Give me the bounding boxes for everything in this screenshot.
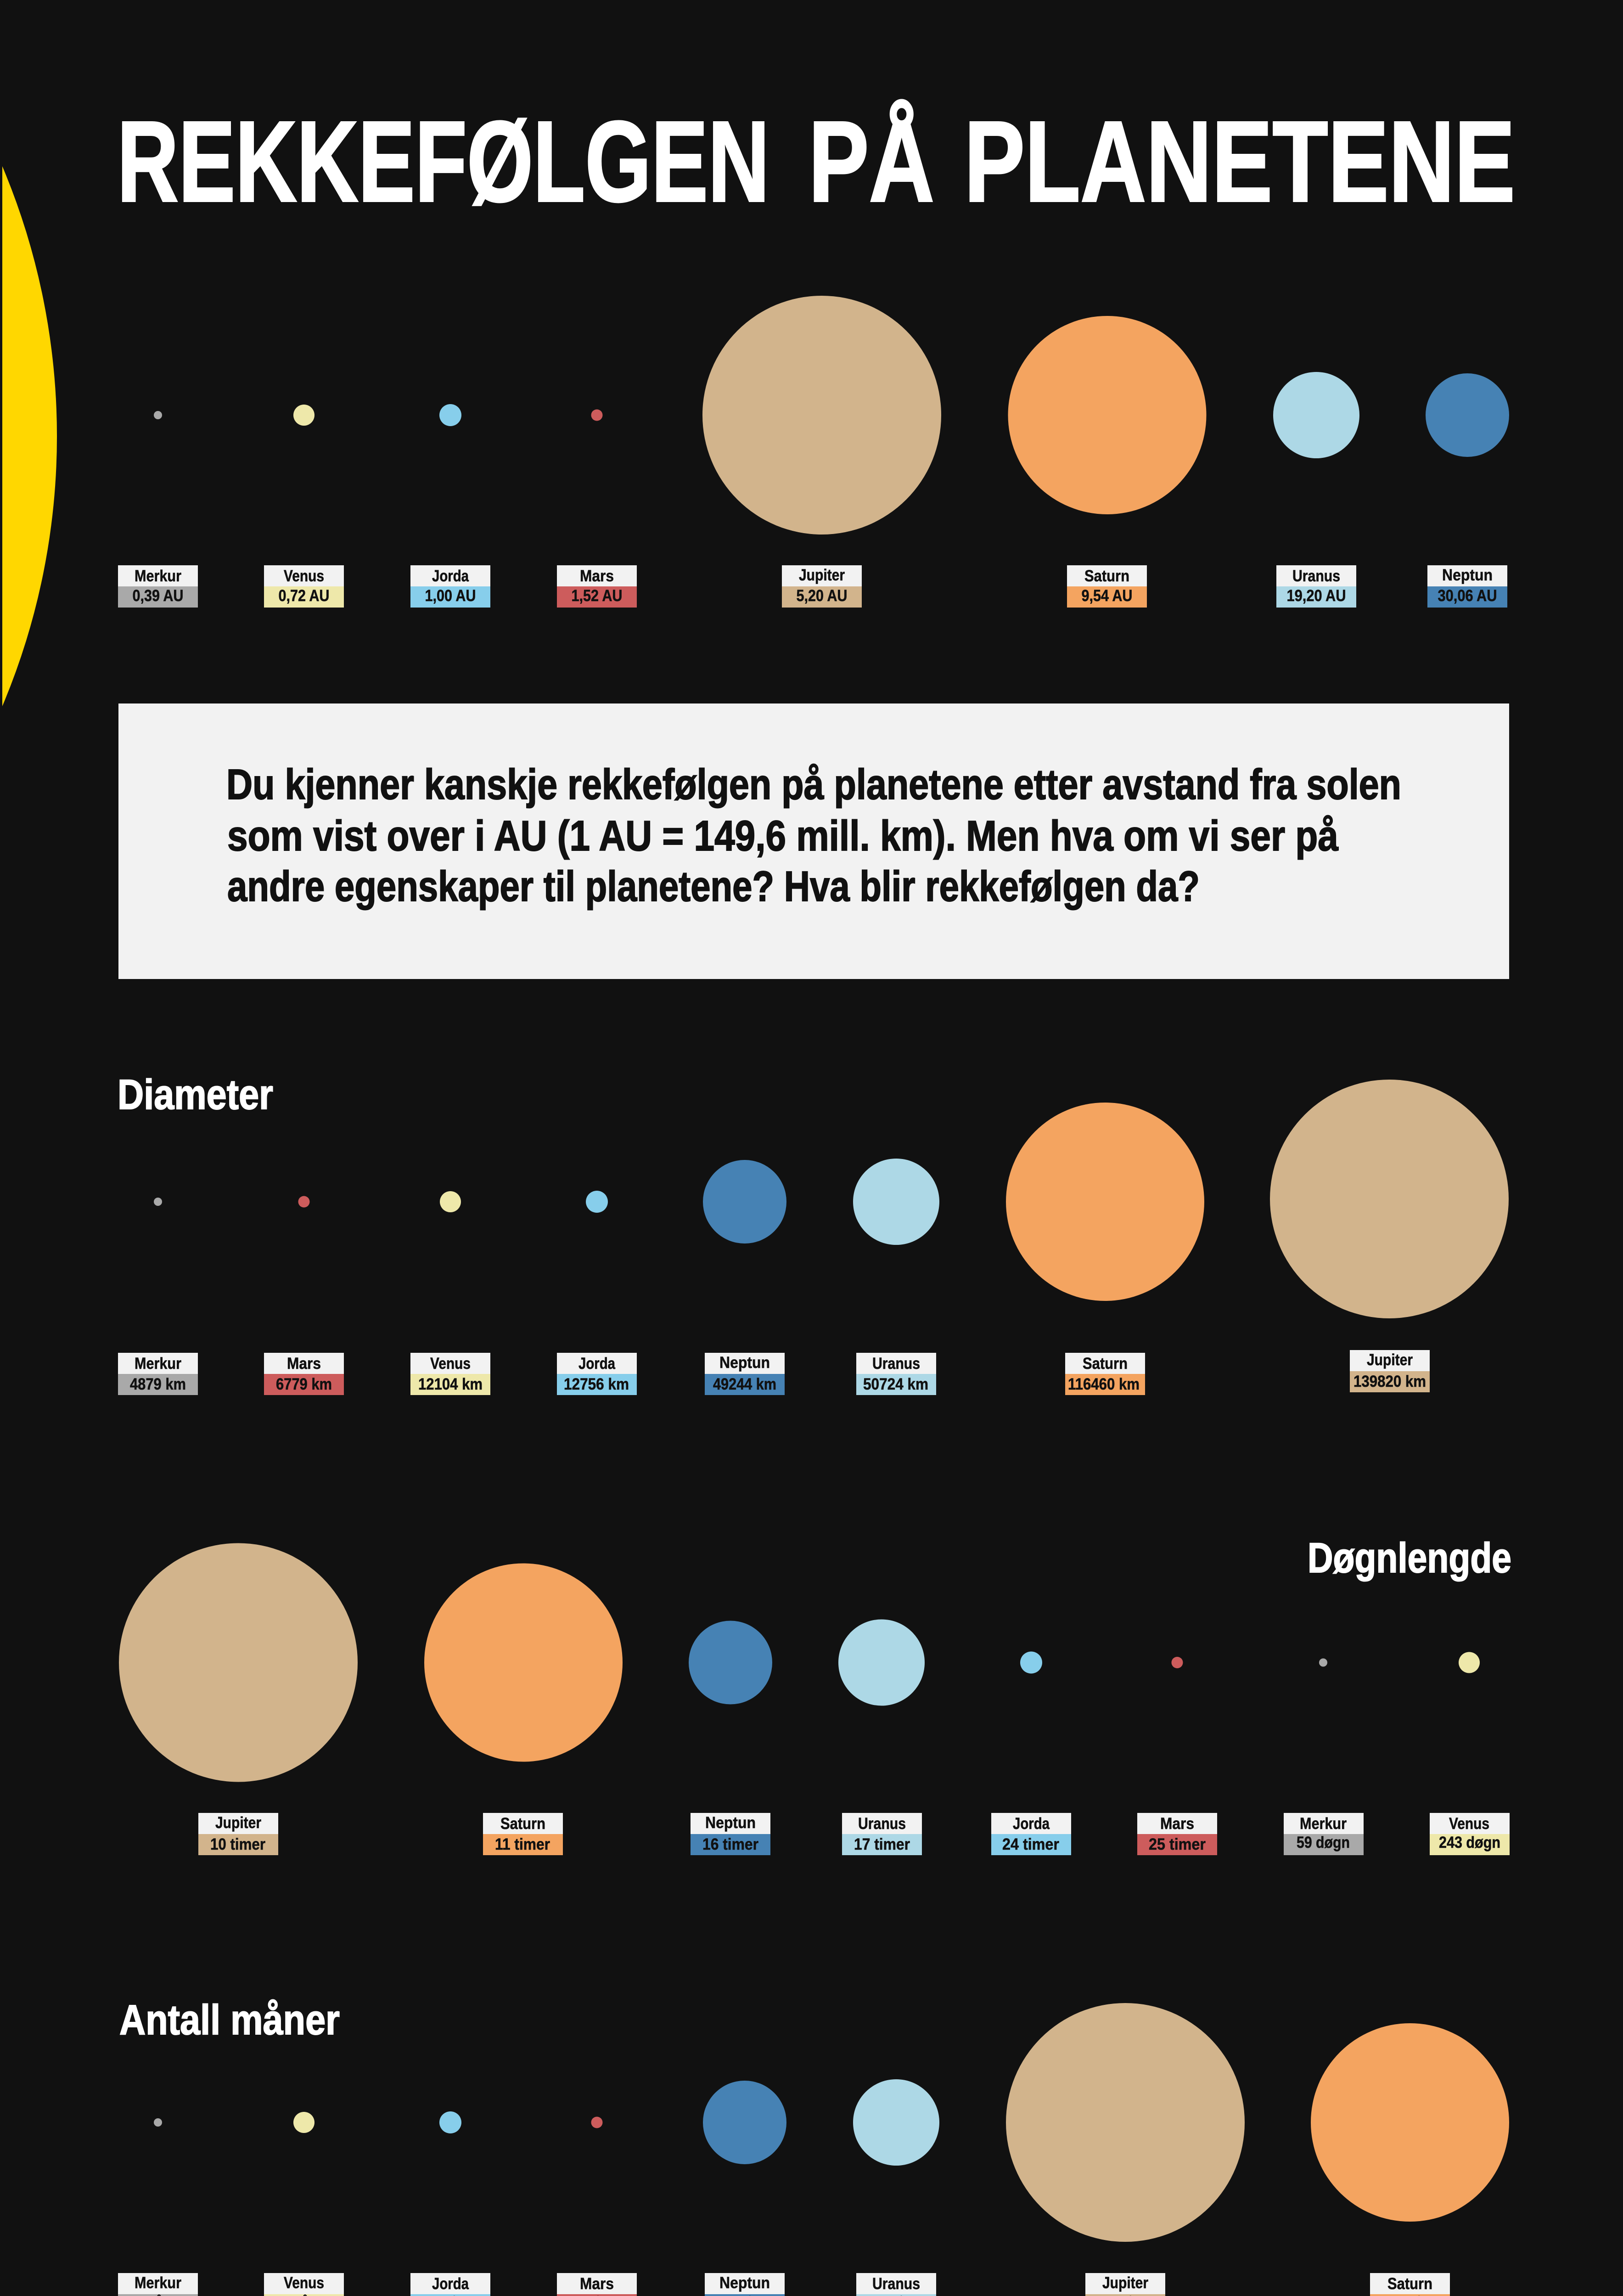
label: Venus 12104 km: 12104 km — [418, 1375, 483, 1393]
label: Jupiter 10 timer — [198, 1813, 278, 1855]
planet: Saturn — [1006, 1103, 1204, 1301]
label: Venus 243 døgn: Venus — [1449, 1815, 1489, 1833]
planet: Uranus — [853, 2079, 939, 2166]
planet: Jupiter — [1270, 1080, 1509, 1318]
label: Saturn 274 måner — [1370, 2273, 1450, 2296]
planet: Neptun — [689, 1621, 772, 1705]
label: Mars 6779 km — [264, 1353, 344, 1395]
intro text: som vist over i AU (1 AU = 149,6 mill. km). Men hva om vi ser på — [227, 812, 1338, 860]
label: Saturn 116460 km: 116460 km — [1068, 1375, 1140, 1393]
label: Saturn 116460 km — [1065, 1353, 1145, 1395]
label: Neptun 16 timer: 16 timer — [702, 1835, 758, 1853]
label: Jupiter 95 måner — [1085, 2273, 1165, 2296]
label: Jorda 12756 km: 12756 km — [564, 1375, 629, 1393]
label: Saturn 9,54 AU: 9,54 AU — [1082, 587, 1132, 605]
label: Mars 25 timer — [1137, 1813, 1217, 1855]
planet: Uranus — [838, 1619, 925, 1705]
label: Merkur 0 måner — [118, 2273, 198, 2296]
label: Merkur 0,39 AU: 0,39 AU — [132, 587, 184, 605]
planet: Merkur — [154, 1198, 162, 1206]
label: Jorda 12756 km: Jorda — [578, 1355, 615, 1373]
label: Venus 0 måner — [264, 2273, 344, 2296]
label: Neptun 49244 km — [705, 1353, 785, 1395]
planet: Mars — [1172, 1657, 1183, 1668]
label: Saturn 11 timer: Saturn — [500, 1815, 545, 1833]
title: REKKEFØLGEN — [117, 97, 769, 225]
label: Mars 1,52 AU — [557, 565, 637, 608]
planet: Saturn — [424, 1563, 623, 1761]
label: Venus 12104 km — [410, 1353, 490, 1395]
planet: Saturn — [1311, 2023, 1509, 2222]
label: Jupiter 139820 km: 139820 km — [1353, 1373, 1426, 1390]
label: Merkur 4879 km: Merkur — [135, 1355, 181, 1373]
label: Jorda 1,00 AU: 1,00 AU — [425, 587, 476, 605]
label: Jorda 1 måne — [410, 2273, 490, 2296]
label: Neptun 16 timer — [691, 1813, 770, 1855]
planet: Venus — [1459, 1652, 1480, 1673]
label: Saturn 274 måner: Saturn — [1387, 2275, 1432, 2293]
planet: Merkur — [154, 411, 162, 419]
label: Mars 1,52 AU: Mars — [580, 567, 614, 585]
label: Neptun 30,06 AU: Neptun — [1442, 566, 1493, 584]
intro text: Du kjenner kanskje rekkefølgen på planetene etter avstand fra solen — [226, 760, 1401, 808]
panel: introduction — [118, 703, 1509, 979]
heading: Diameter: Diameter — [118, 1071, 273, 1118]
label: Neptun 16 timer: Neptun — [705, 1814, 756, 1832]
planet: Jupiter — [1006, 2003, 1245, 2242]
label: Mars 6779 km: Mars — [287, 1355, 321, 1373]
label: Merkur 4879 km: 4879 km — [130, 1375, 186, 1393]
label: Jupiter 139820 km: Jupiter — [1367, 1351, 1413, 1369]
label: Uranus 17 timer: 17 timer — [854, 1835, 910, 1853]
label: Merkur 59 døgn: Merkur — [1300, 1815, 1347, 1833]
label: Neptun 16 måner: Neptun — [719, 2274, 770, 2292]
label: Uranus 28 måner — [856, 2273, 936, 2296]
planet: Neptun — [703, 1160, 786, 1244]
row: distance from the sun — [118, 296, 1509, 608]
label: Venus 12104 km: Venus — [430, 1355, 471, 1373]
icon: sun — [2, 166, 57, 706]
label: Merkur 0,39 AU — [118, 565, 198, 608]
label: Jorda 1 måne: Jorda — [432, 2275, 469, 2293]
label: Jorda 24 timer — [991, 1813, 1071, 1855]
label: Uranus 19,20 AU: Uranus — [1292, 567, 1340, 585]
heading: Antall måner: Antall måner — [119, 1997, 340, 2043]
planet: Saturn — [1008, 316, 1207, 514]
label: Merkur 4879 km — [118, 1353, 198, 1395]
label: Uranus 17 timer: Uranus — [858, 1815, 906, 1833]
label: Mars 6779 km: 6779 km — [276, 1375, 332, 1393]
label: Venus 0,72 AU: Venus — [284, 567, 324, 585]
label: Uranus 28 måner: Uranus — [872, 2275, 920, 2293]
label: Venus 0,72 AU: 0,72 AU — [278, 587, 330, 605]
label: Mars 25 timer: Mars — [1160, 1815, 1194, 1833]
heading: Døgnlengde: Døgnlengde — [1308, 1535, 1511, 1581]
label: Jorda 12756 km — [557, 1353, 637, 1395]
label: Saturn 116460 km: Saturn — [1083, 1355, 1128, 1373]
label: Jupiter 139820 km — [1350, 1350, 1430, 1392]
label: Saturn 11 timer: 11 timer — [495, 1835, 550, 1853]
title — [117, 97, 1515, 225]
planet: Jorda — [439, 2111, 461, 2133]
intro text: andre egenskaper til planetene? Hva blir rekkefølgen da? — [227, 862, 1200, 910]
planet: Uranus — [853, 1159, 939, 1245]
intro text — [226, 760, 1401, 910]
row: Antall måner — [118, 2003, 1509, 2296]
label: Jorda 1,00 AU: Jorda — [432, 567, 469, 585]
planet: Mars — [591, 410, 602, 421]
label: Jupiter 95 måner: Jupiter — [1102, 2274, 1148, 2292]
label: Mars 25 timer: 25 timer — [1149, 1835, 1206, 1853]
label: Mars 2 måner — [557, 2273, 637, 2296]
label: Uranus 50724 km: Uranus — [872, 1355, 920, 1373]
planet: Neptun — [1426, 373, 1509, 457]
label: Venus 0 måner: Venus — [284, 2274, 324, 2292]
label: Mars 2 måner: Mars — [580, 2275, 614, 2293]
label: Merkur 59 døgn — [1284, 1813, 1364, 1855]
planet: Jupiter — [119, 1543, 358, 1782]
label: Venus 243 døgn — [1430, 1813, 1510, 1855]
planet: Merkur — [154, 2118, 162, 2127]
label: Neptun 16 måner — [705, 2273, 785, 2296]
label: Uranus 17 timer — [842, 1813, 922, 1855]
planet: Mars — [591, 2117, 602, 2128]
label: Merkur 0,39 AU: Merkur — [135, 567, 181, 585]
planet: Uranus — [1273, 372, 1359, 458]
label: Neptun 30,06 AU: 30,06 AU — [1438, 587, 1497, 605]
label: Jorda 24 timer: 24 timer — [1002, 1835, 1059, 1853]
label: Saturn 9,54 AU: Saturn — [1084, 567, 1129, 585]
label: Jupiter 5,20 AU — [782, 565, 862, 608]
planet: Mars — [298, 1196, 309, 1208]
label: Neptun 49244 km: 49244 km — [713, 1375, 776, 1393]
planet: Merkur — [1319, 1659, 1327, 1667]
row: Døgnlengde — [119, 1543, 1510, 1855]
label: Uranus 19,20 AU — [1276, 565, 1356, 608]
planet: Jupiter — [702, 296, 941, 535]
label: Saturn 11 timer — [483, 1813, 563, 1855]
label: Merkur 0 måner: Merkur — [135, 2274, 181, 2292]
label: Jorda 24 timer: Jorda — [1013, 1815, 1050, 1833]
label: Neptun 30,06 AU — [1427, 565, 1507, 608]
label: Mars 1,52 AU: 1,52 AU — [571, 587, 623, 605]
label: Jupiter 5,20 AU: 5,20 AU — [796, 587, 848, 605]
label: Uranus 50724 km — [856, 1353, 936, 1395]
planet: Venus — [440, 1191, 461, 1212]
label: Jupiter 10 timer: Jupiter — [215, 1814, 261, 1832]
planet: Jorda — [586, 1191, 608, 1213]
label: Jupiter 5,20 AU: Jupiter — [799, 566, 845, 584]
label: Merkur 59 døgn: 59 døgn — [1297, 1834, 1350, 1851]
planet: Neptun — [703, 2081, 786, 2164]
planet: Venus — [293, 405, 314, 426]
planet: Jorda — [439, 404, 461, 426]
label: Jorda 1,00 AU — [410, 565, 490, 608]
row: Diameter — [118, 1080, 1509, 1395]
label: Neptun 49244 km: Neptun — [719, 1354, 770, 1372]
label: Jupiter 10 timer: 10 timer — [210, 1835, 265, 1853]
planet: Venus — [293, 2112, 314, 2133]
planet: Jorda — [1020, 1651, 1042, 1673]
label: Venus 243 døgn: 243 døgn — [1439, 1834, 1500, 1851]
label: Uranus 19,20 AU: 19,20 AU — [1286, 587, 1346, 605]
label: Saturn 9,54 AU — [1067, 565, 1147, 608]
label: Uranus 50724 km: 50724 km — [863, 1375, 928, 1393]
label: Venus 0,72 AU — [264, 565, 344, 608]
title: PÅ — [809, 97, 934, 225]
